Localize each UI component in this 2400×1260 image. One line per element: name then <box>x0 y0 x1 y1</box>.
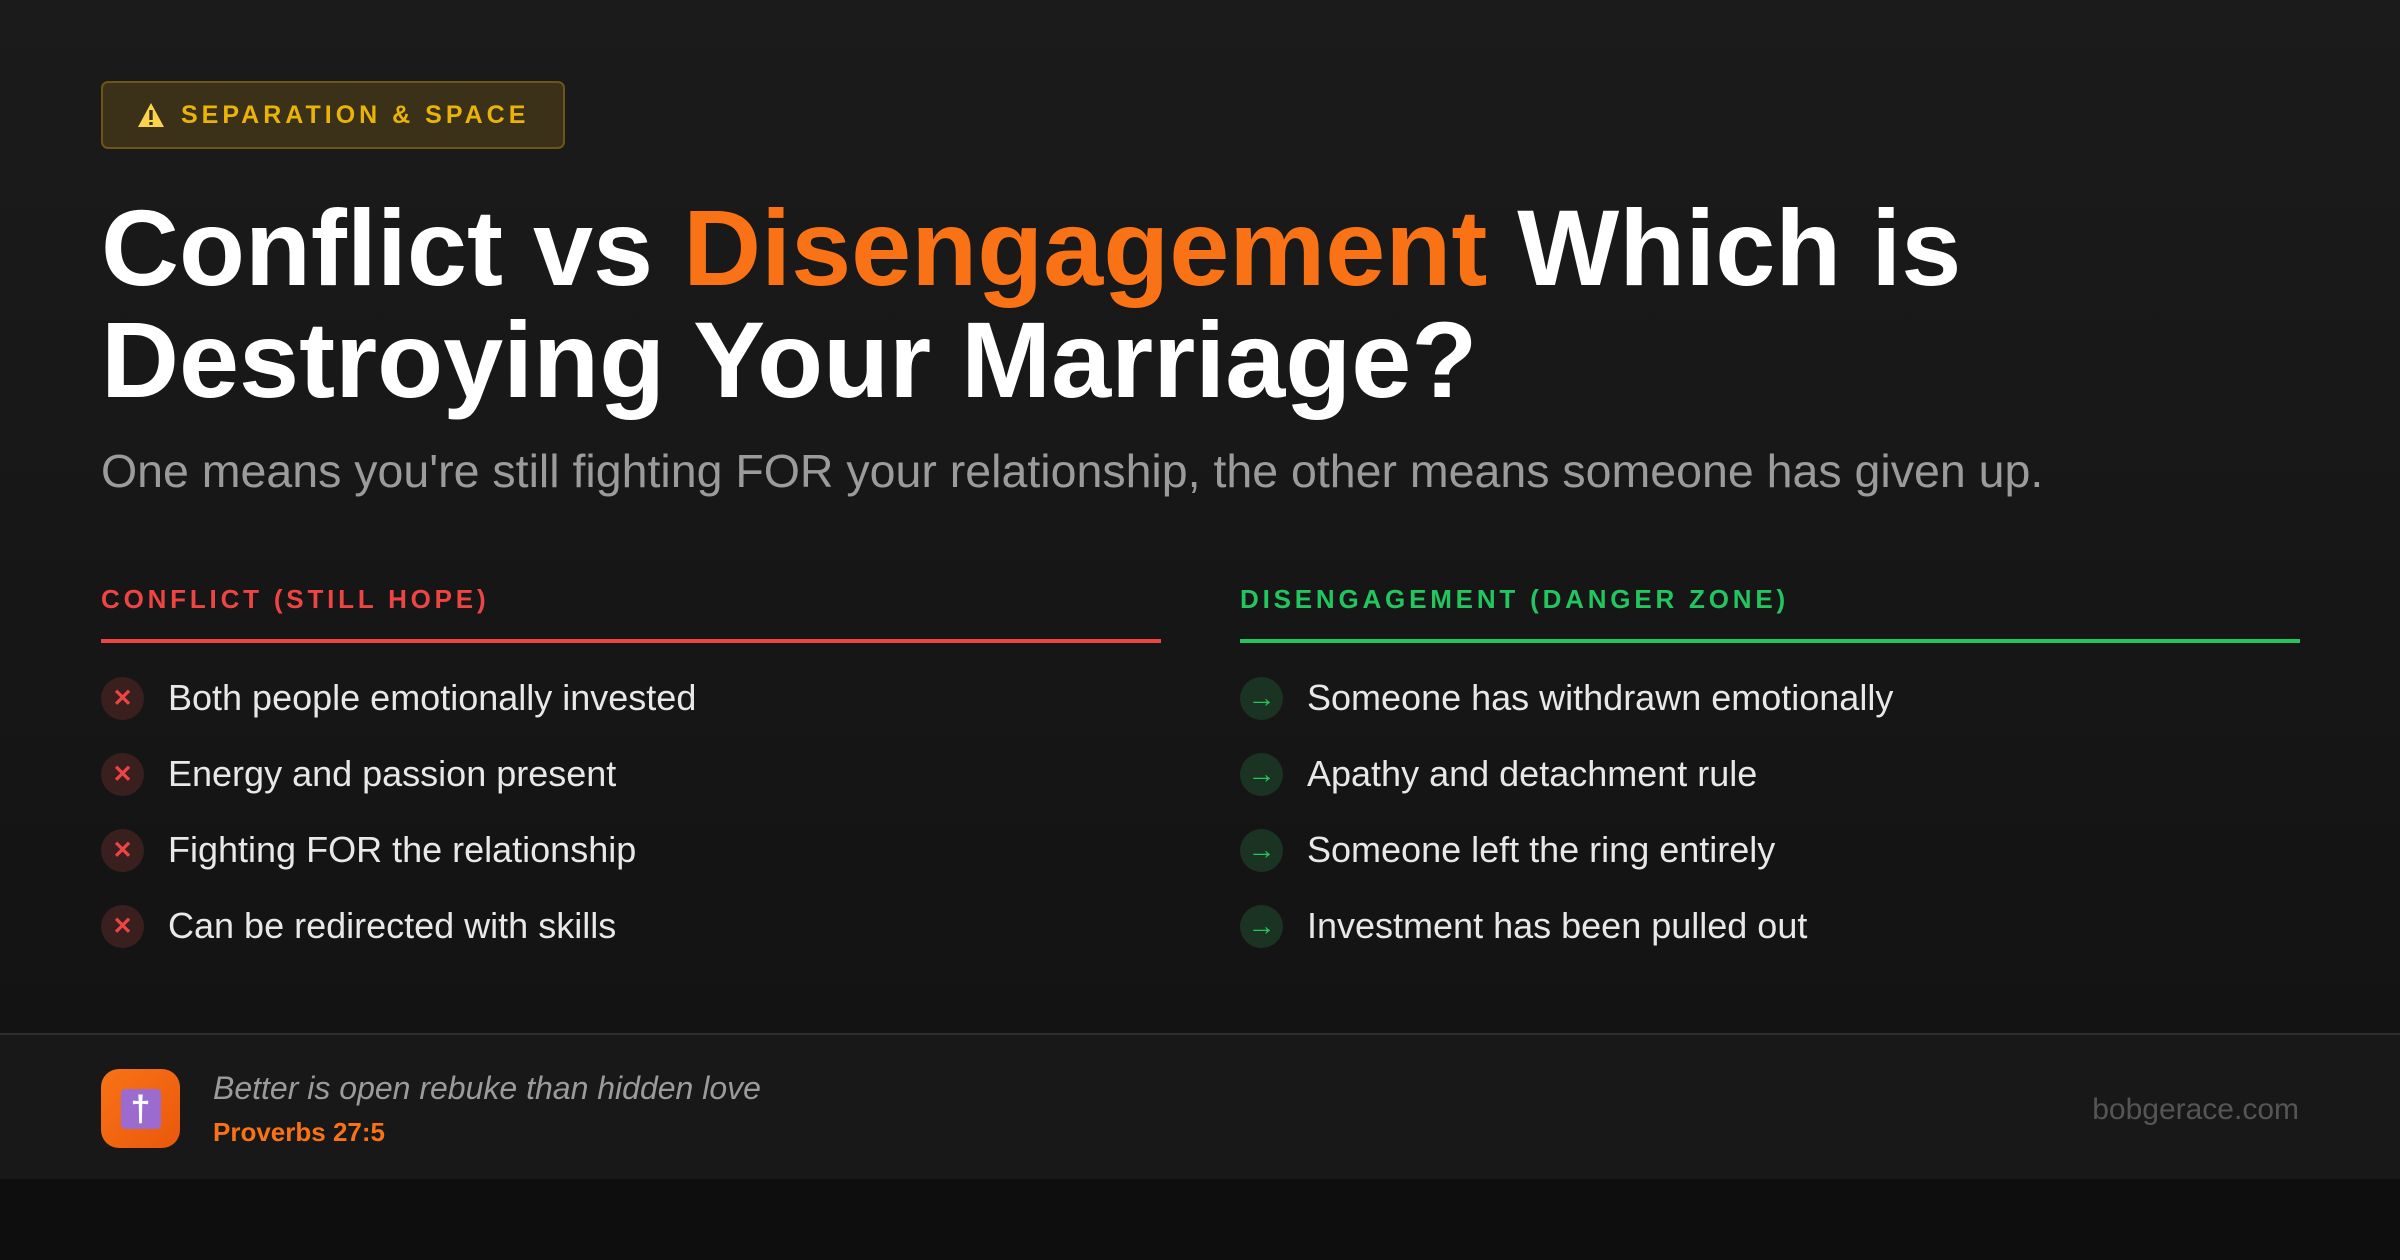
footer <box>0 1033 2400 1179</box>
panel: disengagement <box>1240 584 2300 948</box>
heading: conflict: CONFLICT (STILL HOPE) <box>101 584 489 614</box>
list: disengagement items: Investment has been pulled out <box>1307 905 1807 946</box>
site url: bobgerace.com <box>2092 1093 2299 1126</box>
list: conflict items: Fighting FOR the relationship <box>168 829 636 870</box>
list: disengagement items: → <box>1248 834 1276 865</box>
quote: Better is open rebuke than hidden love <box>213 1070 761 1106</box>
list: conflict items: ✕ <box>112 836 133 864</box>
title <box>101 187 1961 420</box>
title: Destroying Your Marriage? <box>101 299 1477 420</box>
list: disengagement items: Someone has withdrawn emotionally <box>1307 677 1893 718</box>
icon: cross <box>101 1069 180 1148</box>
list: conflict items <box>101 677 696 948</box>
reference: Proverbs 27:5 <box>213 1117 385 1147</box>
list: disengagement items: → <box>1248 910 1276 941</box>
heading: disengagement: DISENGAGEMENT (DANGER ZONE) <box>1240 584 1789 614</box>
list: disengagement items: → <box>1248 758 1276 789</box>
list: conflict items: ✕ <box>112 912 133 940</box>
list: disengagement items: Apathy and detachment rule <box>1307 753 1757 794</box>
badge: SEPARATION & SPACE <box>181 100 529 128</box>
list: disengagement items <box>1240 677 1894 948</box>
list: conflict items: ✕ <box>112 684 133 712</box>
list: conflict items: Energy and passion present <box>168 753 616 794</box>
list: disengagement items: → <box>1248 682 1276 713</box>
title: Conflict vs Disengagement Which is <box>101 187 1961 308</box>
list: conflict items: ✕ <box>112 760 133 788</box>
list: conflict items: Can be redirected with skills <box>168 905 616 946</box>
list: conflict items: Both people emotionally invested <box>168 677 696 718</box>
list: disengagement items: Someone left the ring entirely <box>1307 829 1775 870</box>
badge <box>101 81 565 149</box>
subtitle: One means you're still fighting FOR your relationship, the other means someone has given up. <box>101 445 2043 497</box>
icon: cross: † <box>130 1088 151 1128</box>
panel: conflict <box>101 584 1161 948</box>
